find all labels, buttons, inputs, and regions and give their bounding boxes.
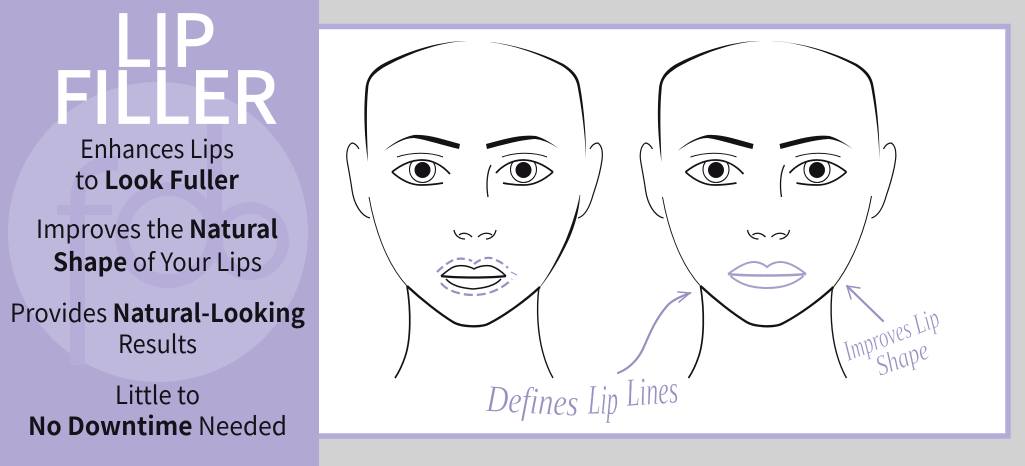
- arrow: defines lip lines: [618, 292, 690, 373]
- logo watermark: [8, 82, 308, 382]
- label: improves lip shape: Improves Lip: [838, 302, 944, 368]
- label: defines lip lines: [485, 366, 680, 425]
- head outline: [658, 41, 880, 162]
- benefit: enhances lips: Enhances Lips: [80, 130, 234, 166]
- benefit: little downtime: No Downtime Needed: [28, 407, 289, 443]
- face: before: [347, 41, 602, 378]
- lips: enhanced: [728, 262, 806, 288]
- ears: [347, 143, 602, 218]
- label: defines lip lines: Lines: [624, 366, 680, 415]
- arrow: improves lip shape: [847, 286, 883, 321]
- eyes: [392, 156, 553, 185]
- nose: [748, 165, 790, 239]
- label: defines lip lines: Defines: [485, 378, 580, 425]
- eyebrows: [678, 135, 856, 151]
- lips: original: [441, 266, 506, 289]
- eyes: [686, 156, 846, 185]
- lips: dashed enhancement outline: [437, 258, 517, 295]
- benefit: improves natural shape: Shape of Your Lips: [53, 243, 267, 279]
- label: improves lip shape: Shape: [871, 334, 933, 383]
- eyebrows: [384, 135, 562, 151]
- benefit: enhances lips: to Look Fuller: [75, 161, 242, 197]
- eyelid creases: [397, 153, 547, 157]
- title: FILLER: [52, 42, 277, 144]
- eyelid creases: [690, 153, 840, 157]
- face: after: [640, 41, 896, 378]
- benefit: little downtime: Little to: [115, 376, 200, 412]
- ears: [640, 143, 896, 218]
- jaw, chin and neck: [662, 196, 872, 378]
- label: improves lip shape: [838, 302, 944, 383]
- head outline: [364, 41, 586, 162]
- benefit: natural-looking results: Results: [118, 325, 197, 361]
- benefit: natural-looking results: Provides Natural-Looking: [10, 294, 313, 330]
- label: defines lip lines: Lip: [587, 378, 618, 424]
- benefit: improves natural shape: Improves the Natural: [36, 210, 281, 246]
- panel: lip filler benefits: [0, 0, 319, 466]
- nose: [454, 165, 496, 239]
- frame panel: [316, 26, 1008, 436]
- jaw, chin and neck: [369, 195, 580, 378]
